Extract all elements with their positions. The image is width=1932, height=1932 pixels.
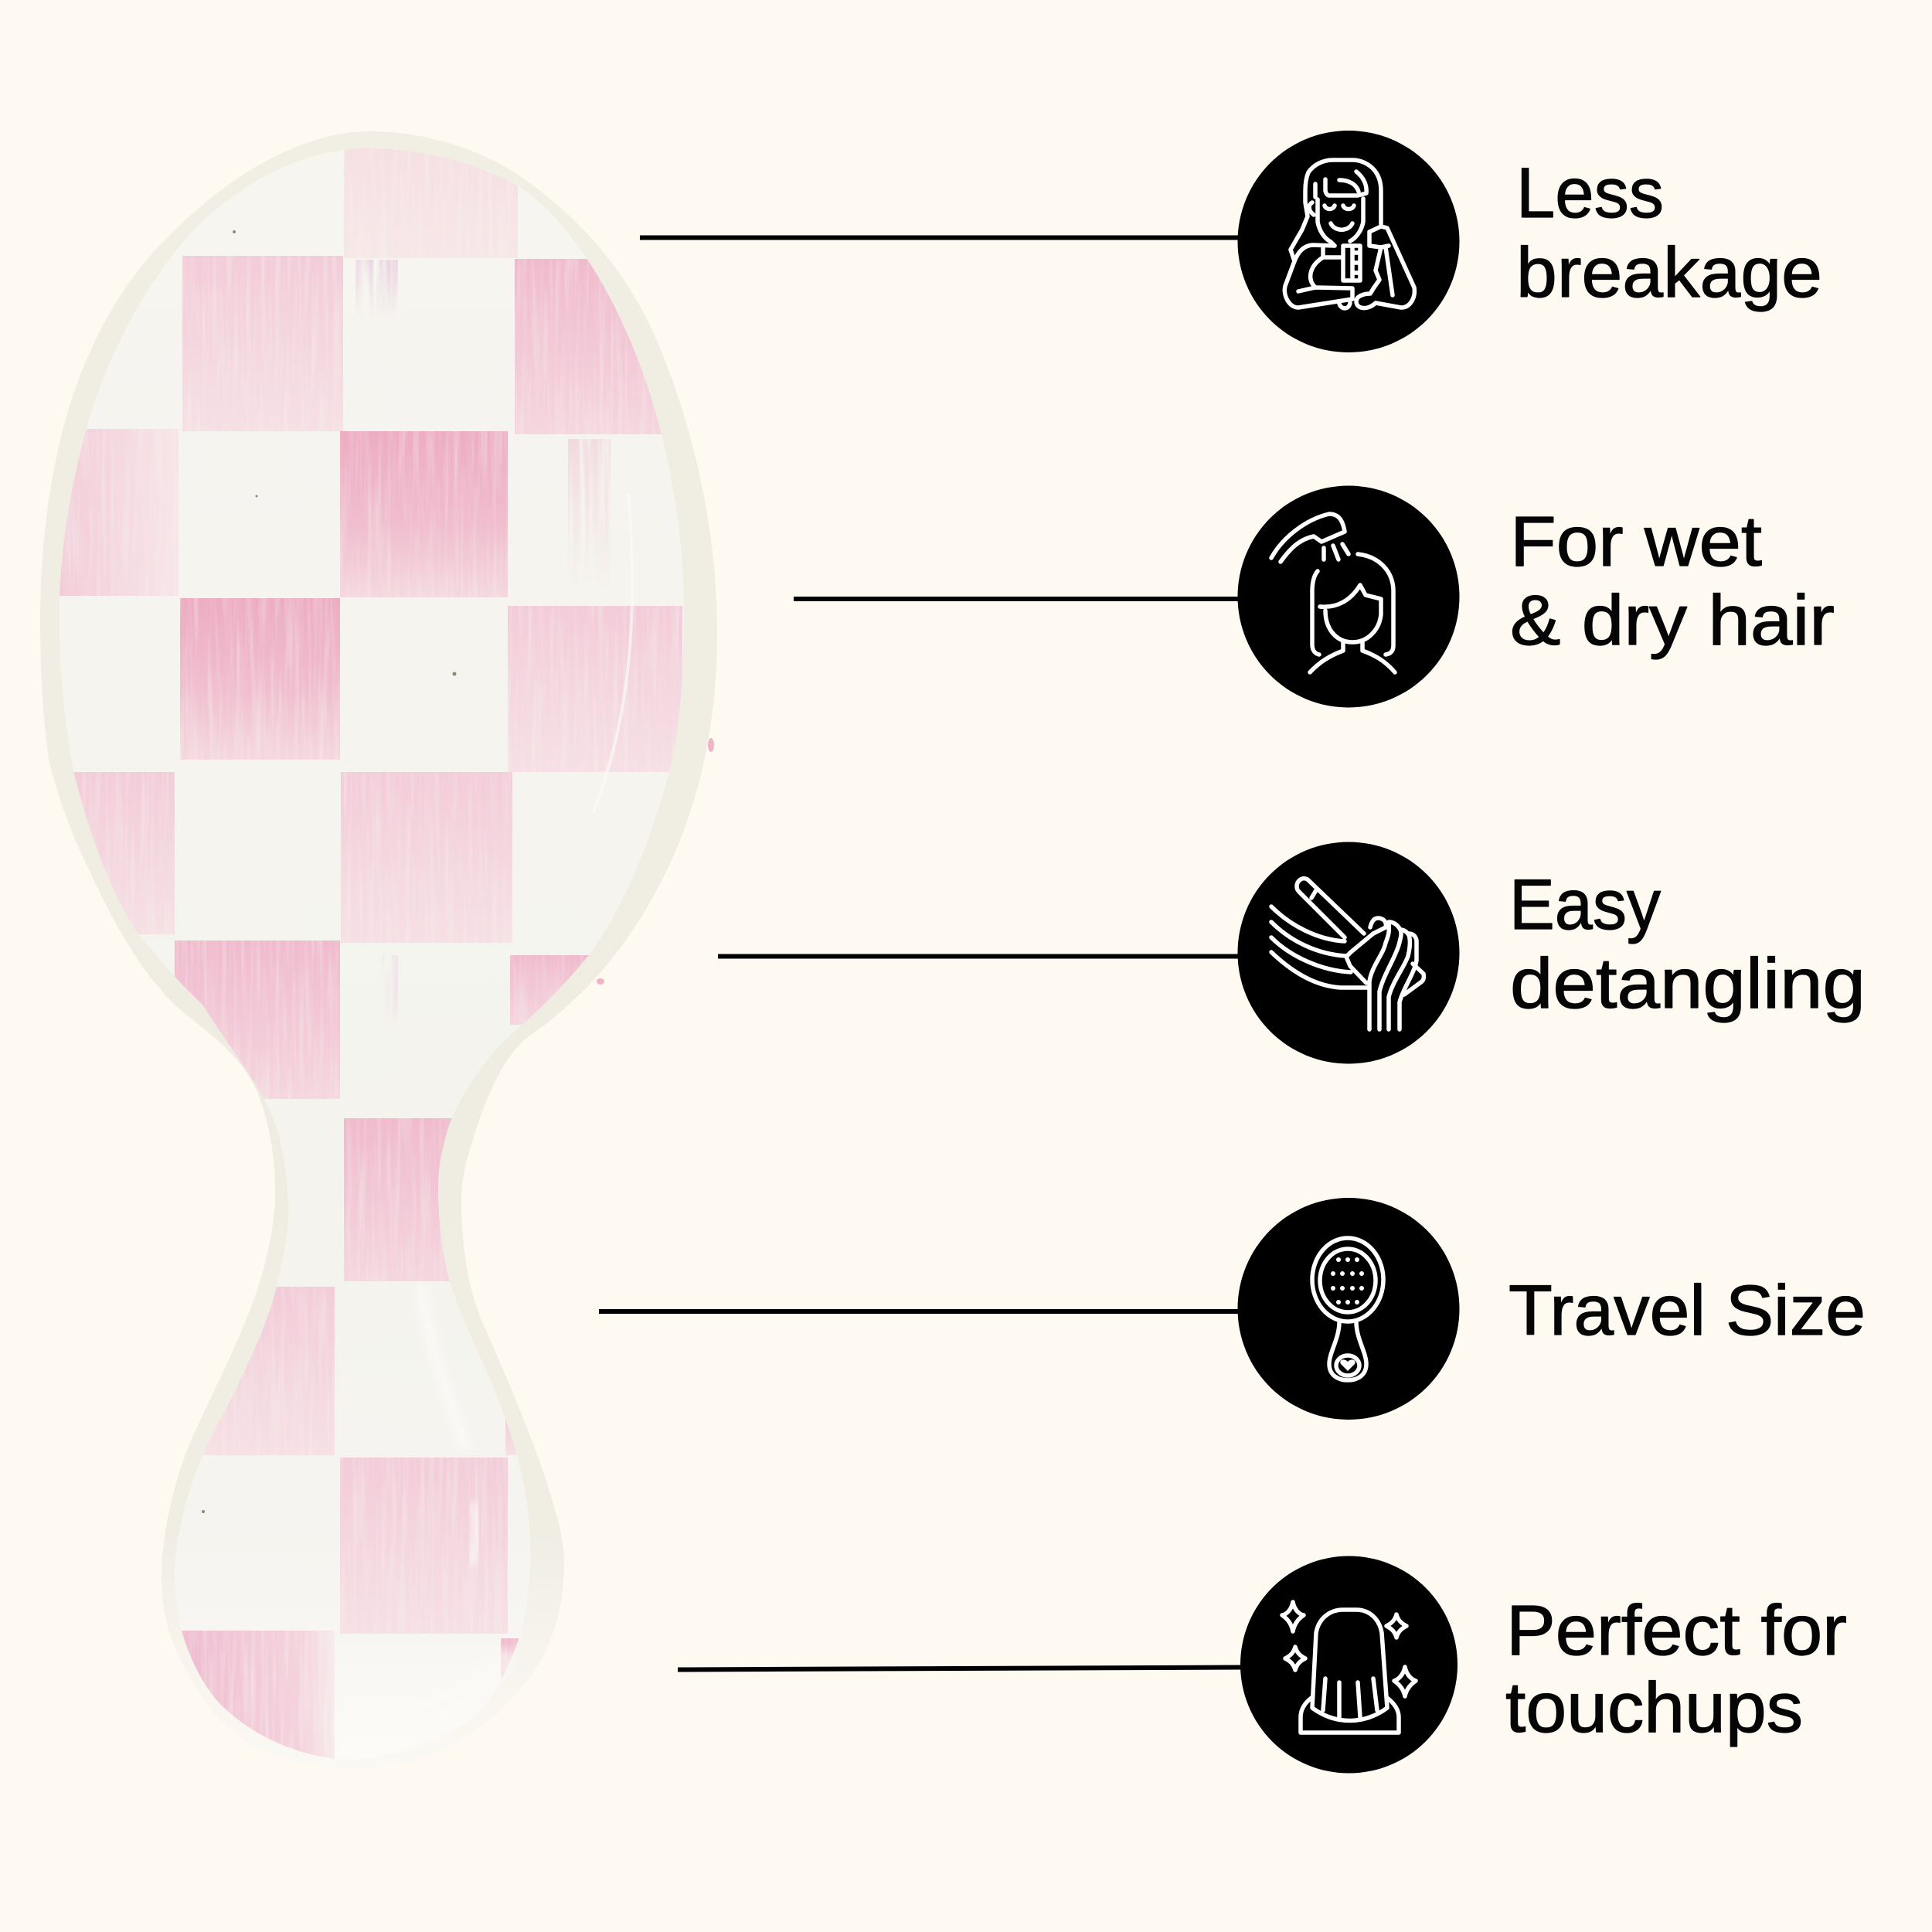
- connector line: [678, 1668, 1241, 1669]
- label: detangling: [1510, 944, 1866, 1023]
- label: Travel Size: [1509, 1271, 1866, 1350]
- icon badge: shiny hair from behind: [1240, 1556, 1458, 1773]
- label: [1510, 502, 1835, 660]
- connector line: [640, 235, 1240, 240]
- faint lilac brush marks: [355, 260, 611, 1029]
- label: Perfect for: [1506, 1591, 1847, 1670]
- label: [1516, 154, 1822, 312]
- bristle dots: [1331, 1257, 1364, 1304]
- brush rim: [40, 131, 717, 1769]
- heart: [1340, 1359, 1355, 1371]
- connector line: [794, 597, 1240, 601]
- label: touchups: [1505, 1668, 1803, 1747]
- paint specks: [202, 230, 456, 1513]
- pink paint drips on rim: [597, 738, 714, 985]
- feature: Travel Size: [599, 1198, 1866, 1420]
- icon badge: small paddle brush: [1238, 1198, 1459, 1420]
- feature: For wet & dry hair: [794, 485, 1835, 708]
- feature: Easy detangling: [718, 842, 1866, 1063]
- feature: Less breakage: [640, 131, 1822, 352]
- pink checkerboard pattern: [54, 145, 682, 1770]
- label: Less: [1516, 154, 1664, 233]
- label: For wet: [1510, 502, 1762, 581]
- label: & dry hair: [1510, 581, 1835, 660]
- connector line: [718, 954, 1240, 958]
- icon badge: shower over head: [1238, 485, 1459, 708]
- label: [1509, 866, 1866, 1023]
- label: [1505, 1591, 1847, 1747]
- glossy highlights: [348, 495, 632, 1731]
- icon badge: brushing hair strands: [1238, 842, 1459, 1063]
- brush face: [60, 148, 684, 1759]
- connector line: [599, 1309, 1240, 1314]
- hair brush product illustration: [40, 131, 717, 1770]
- icon badge: woman brushing hair: [1238, 131, 1459, 352]
- label: breakage: [1516, 233, 1822, 312]
- feature: Perfect for touchups: [678, 1556, 1847, 1773]
- label: Easy: [1509, 866, 1661, 944]
